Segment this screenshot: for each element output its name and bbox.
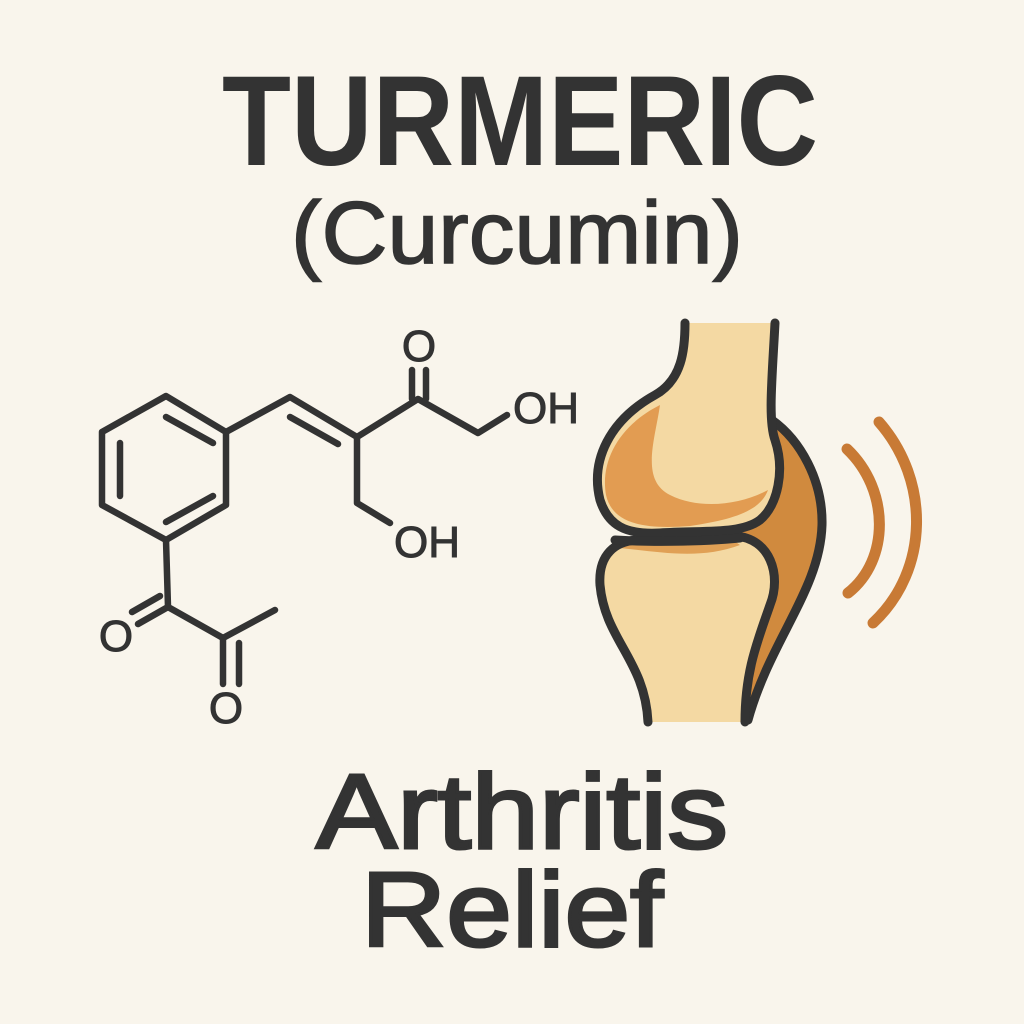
patella / cartilage back xyxy=(700,420,822,720)
molecule atom labels: OH xyxy=(513,384,579,433)
icon: pain waves xyxy=(847,422,917,623)
molecule atom labels: OH xyxy=(394,518,460,567)
tibia xyxy=(600,536,775,722)
molecule atom labels: O xyxy=(99,612,133,661)
heading: Arthritis Relief: Relief xyxy=(361,851,664,969)
icon: knee joint xyxy=(597,323,822,722)
molecule atom labels: O xyxy=(209,684,243,733)
molecule atom labels: O xyxy=(402,322,436,371)
femur xyxy=(597,323,780,533)
heading: Arthritis Relief: Arthritis xyxy=(316,753,728,871)
heading: Arthritis Relief xyxy=(316,753,728,969)
title: TURMERIC xyxy=(222,50,818,193)
molecule structure xyxy=(102,370,507,684)
subtitle: (Curcumin) xyxy=(291,183,743,282)
molecule atom labels xyxy=(99,322,579,733)
